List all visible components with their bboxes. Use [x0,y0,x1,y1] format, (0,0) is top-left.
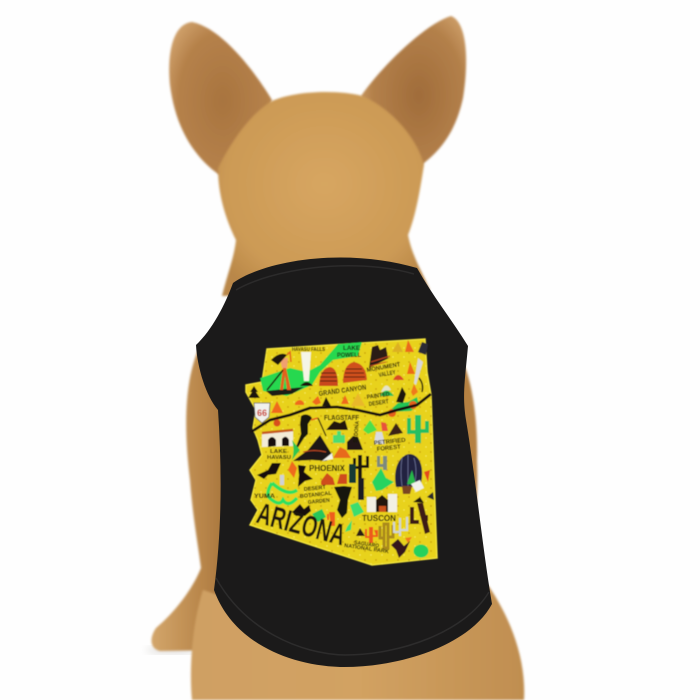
map labels: HAVASU [267,455,291,461]
grey cactus [394,517,407,536]
map labels: SAGUARO [354,540,380,550]
map labels: PAINTED [366,392,391,401]
dark rocks right [427,492,434,500]
hips [191,585,524,700]
map labels: BOTANICAL [300,491,333,500]
orange cactus Havasu [288,461,297,478]
Lake Havasu bridge [262,429,293,447]
orange rock centre [333,447,351,458]
pale yellow tree [351,393,365,406]
orange tree [271,401,283,413]
round green cactus [414,544,428,558]
map labels: GARDEN [308,498,330,506]
green and orange plants south [345,520,352,532]
map labels: TUSCON [362,514,396,523]
dog body [151,350,524,700]
route 66 sign [254,403,270,423]
map labels: PHOENIX [309,464,346,473]
map labels: HAVASU FALLS [292,347,325,353]
map outline [246,339,437,565]
pine tree left [248,386,260,398]
large green prickly pear [372,468,394,491]
small green cactus centre [333,431,345,443]
dark bird south [391,539,410,558]
green agave [363,420,377,434]
petrified forest stumps [374,432,385,444]
shirt body [196,257,492,667]
speckled yellow texture [246,339,437,565]
floor shadow [146,646,198,654]
small red pot [274,420,280,426]
orange flower south [405,537,412,543]
route 66 road [251,394,431,432]
dark rocks [413,497,424,503]
dark mountain with snow [292,435,333,461]
map labels: SEDONA [353,421,361,443]
grey tall plant [280,475,284,485]
paddle boarder [266,352,304,396]
agave dark plant [292,504,311,516]
flagstaff mountains [326,420,348,430]
orange rocks Phoenix [321,473,347,485]
dark coyote [298,465,313,487]
large green saguaro [407,415,429,443]
dark cactus pair [353,455,387,478]
vintage green car [388,387,419,417]
Arizona illustrated map [246,339,437,565]
tank top [196,257,492,667]
mission building [367,494,397,512]
orange cactus centre [327,512,335,526]
dark prickly pear with dots [334,486,352,518]
map labels: LAKE [343,345,361,352]
map labels: FLAGSTAFF [324,415,360,422]
Flagstaff hiker figure [296,414,326,449]
waterfall rocks [300,382,313,386]
map labels: POWELL [337,352,361,359]
dog head and neck [218,92,430,296]
map labels: MONUMENT [366,362,401,374]
collar seam [236,266,414,290]
map labels: VALLEY [378,370,396,379]
dark rock small [356,528,365,536]
dog right ear [361,16,466,175]
grey building [358,478,364,500]
dark bird left [257,463,281,479]
map labels: NATIONAL PARK [344,543,389,555]
waterfall [301,352,311,381]
tan saguaro [380,524,393,548]
front leg and paw [151,350,240,651]
green plants centre [312,509,326,522]
map labels: DESERT [368,399,389,408]
hem seam [216,578,489,655]
big brown saguaro [410,503,430,534]
red flower right [424,470,430,482]
green snake [268,483,297,504]
small orange plants [295,395,349,405]
green lake area [260,342,362,396]
right flank [445,360,477,545]
map labels [254,345,407,555]
map labels: LAKE [270,449,287,455]
map labels: GRAND CANYON [318,384,367,398]
Monument Valley mesa [369,345,391,368]
dog left ear [169,22,272,180]
Sedona rocks [347,436,363,450]
dark building [349,464,356,483]
small desert plants top right [380,340,428,396]
map labels: YUMA [254,493,275,500]
small pine tree [322,397,331,406]
Grand Canyon buttes [319,362,367,386]
map labels: FOREST [377,444,401,453]
ARIZONA title: ARIZONA [253,497,349,552]
map labels: DESERT [304,485,327,493]
route 66 sign: 66 [257,408,267,418]
barrel cactus [395,454,424,494]
map labels: PETRIFIED [374,438,407,447]
